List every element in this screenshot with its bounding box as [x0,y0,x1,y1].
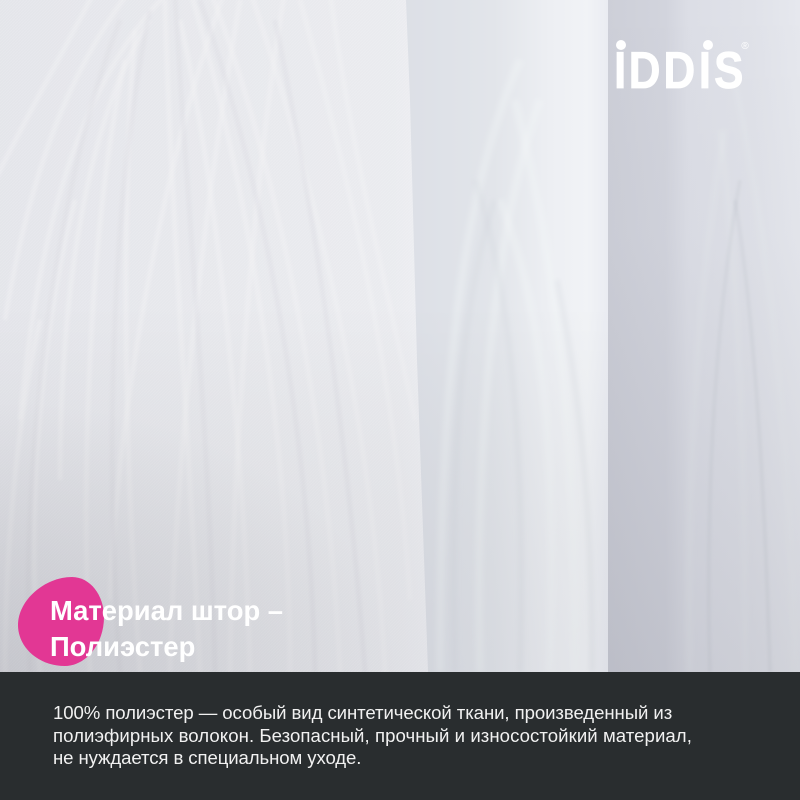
heading: Полиэстер [50,631,195,662]
right curtain fold [608,0,800,672]
heading [50,595,283,662]
description bar [0,672,800,800]
description text: полиэфирных волокон. Безопасный, прочный и износостойкий материал, [53,724,692,746]
logo: IDDIS [614,42,743,100]
description text: 100% полиэстер — особый вид синтетической ткани, произведенный из [53,702,672,723]
description text [53,702,692,768]
heading: Материал штор – [50,595,283,626]
pink blob [18,577,104,666]
description text: не нуждается в специальном уходе. [53,747,361,768]
logo: ® [741,41,749,52]
middle curtain fold [400,0,608,672]
left curtain fold [0,0,430,672]
